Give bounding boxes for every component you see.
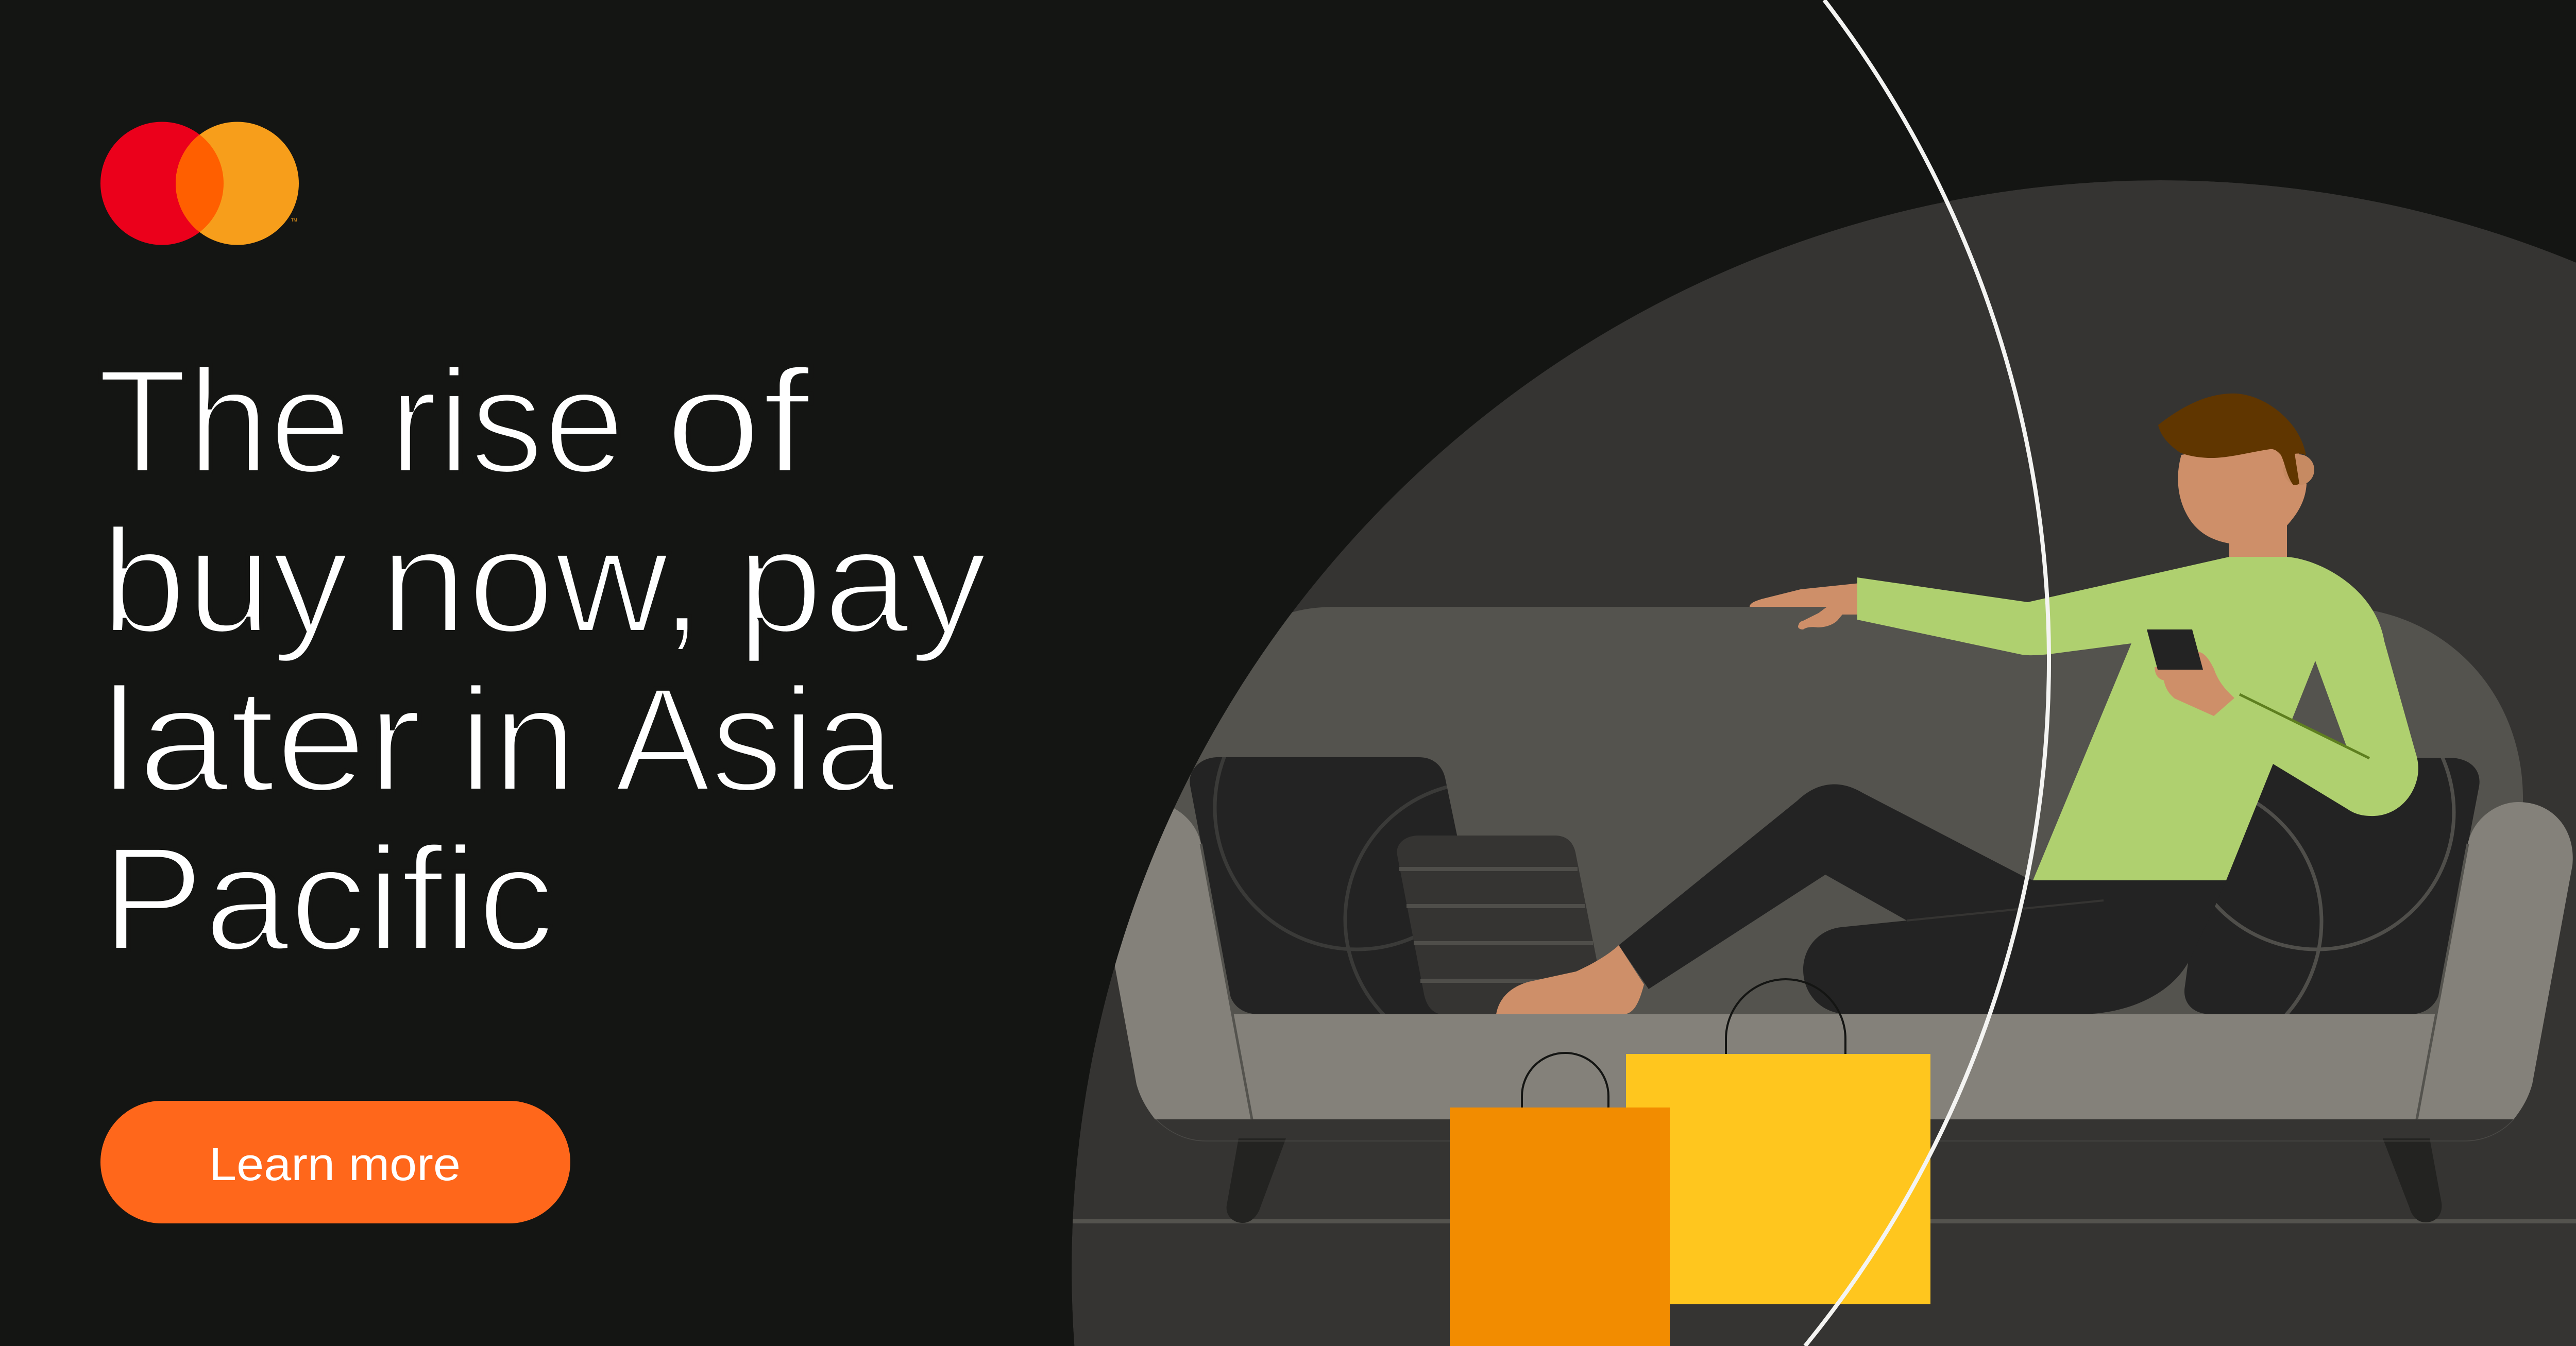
- sofa seat: [1233, 1014, 2436, 1119]
- title: later: [101, 657, 422, 823]
- yellow shopping bag: [1626, 1054, 1930, 1304]
- button: learn more: Learn more: [209, 1139, 461, 1190]
- pointing hand: [1750, 583, 1860, 629]
- right cushion: [2184, 758, 2480, 1014]
- sofa base line: [1156, 1119, 2514, 1141]
- title: buy: [101, 498, 349, 665]
- sofa arm left: [1096, 802, 1252, 1119]
- foot: [1496, 945, 1644, 1014]
- title: in: [459, 657, 577, 823]
- illustration: room circle and scene: [1030, 180, 2576, 1346]
- title: Asia: [615, 657, 896, 823]
- neck and face: [2178, 438, 2307, 559]
- logo: Mastercard circles: TM: [291, 218, 297, 223]
- title: The: [97, 338, 351, 504]
- sofa arm right: [2417, 802, 2573, 1119]
- person: [1496, 394, 2418, 1014]
- title: Pacific: [101, 816, 554, 982]
- sweater: [1857, 557, 2418, 880]
- title: pay: [737, 498, 987, 665]
- button: learn more: [100, 1101, 570, 1223]
- phone: [2147, 629, 2203, 670]
- hair: [2158, 394, 2306, 485]
- trouser crease: [1907, 900, 2104, 921]
- white arc: [1805, 0, 2049, 1346]
- floor line: [1030, 1219, 2576, 1223]
- trousers: [1619, 785, 2226, 1014]
- yellow bag handle: [1726, 979, 1845, 1054]
- left cushion: [1190, 757, 1457, 1014]
- logo: Mastercard circles: [100, 122, 299, 245]
- sofa seams: [1201, 844, 2468, 1119]
- sofa legs: [1227, 1138, 2442, 1223]
- title: now,: [380, 498, 704, 664]
- sofa back: [1149, 607, 2523, 1014]
- title: rise: [389, 338, 625, 504]
- orange shopping bag: [1450, 1108, 1670, 1346]
- striped cushion: [1397, 836, 1607, 1014]
- ear: [2283, 454, 2314, 485]
- arm gap: [2292, 661, 2347, 747]
- title: of: [665, 338, 811, 504]
- holding hand: [2155, 652, 2234, 716]
- title: [97, 338, 987, 982]
- orange bag handle: [1522, 1053, 1608, 1108]
- sleeve crease: [2240, 694, 2369, 758]
- room background circle: [1072, 180, 2576, 1346]
